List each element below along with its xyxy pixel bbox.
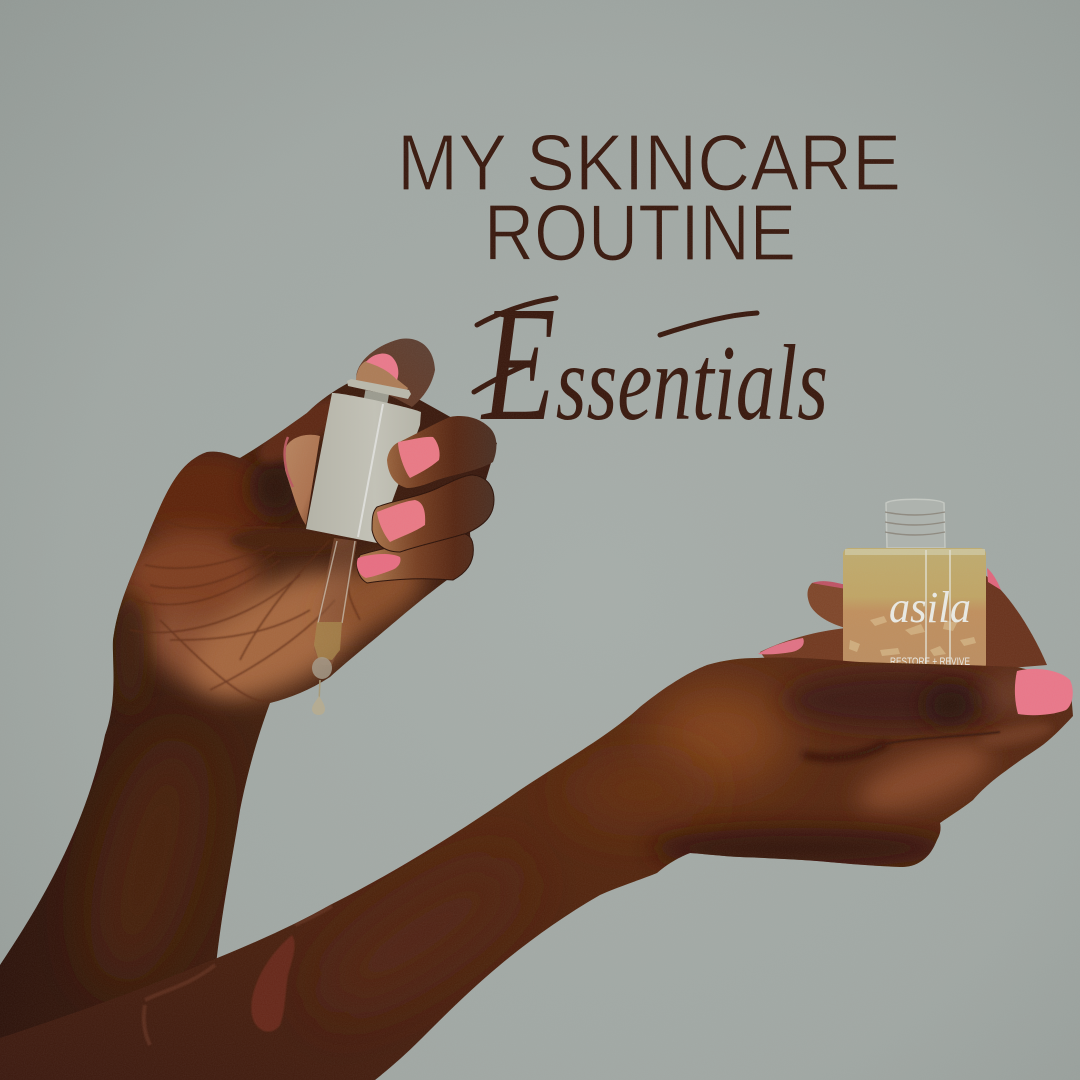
index finger left bbox=[808, 582, 846, 628]
thumb tip on left of cap bbox=[285, 435, 320, 525]
finger one bbox=[387, 416, 496, 488]
dropper cap disc bbox=[347, 379, 411, 399]
title line: my skincare: MY SKINCARE bbox=[397, 118, 901, 207]
arm and hand base bbox=[0, 640, 1080, 1080]
left forearm and hand bbox=[0, 338, 497, 1038]
dropper bbox=[306, 379, 421, 715]
top finger nail bbox=[366, 354, 398, 380]
glass top bbox=[845, 549, 985, 555]
title line: routine: ROUTINE bbox=[484, 188, 796, 277]
brush swashes bbox=[474, 298, 757, 392]
glass tip bbox=[312, 657, 332, 679]
top finger pad bbox=[356, 361, 408, 396]
lower finger left bbox=[760, 628, 846, 665]
bottle neck bbox=[886, 499, 945, 548]
lower nail bbox=[758, 638, 804, 654]
back nail bbox=[987, 568, 1001, 590]
top finger bbox=[356, 339, 435, 407]
oil drop bbox=[312, 696, 325, 715]
neck threads bbox=[885, 512, 945, 535]
thumb nail edge bbox=[285, 437, 293, 487]
palm creases bbox=[130, 520, 360, 701]
oil sheen on arm bbox=[144, 906, 332, 1045]
thread of oil bbox=[319, 680, 320, 702]
back finger right of bottle bbox=[985, 575, 1047, 670]
crease under thumb bbox=[805, 744, 885, 758]
thumb nail bbox=[1015, 669, 1073, 715]
bottle tagline: RESTORE + REVIVE bbox=[890, 656, 970, 668]
tube edge bbox=[318, 541, 355, 623]
finger two bbox=[372, 475, 494, 552]
title bbox=[397, 118, 901, 277]
script subtitle: essentials bbox=[474, 272, 828, 455]
right hand back fingers bbox=[758, 568, 1047, 670]
index nail bbox=[812, 581, 846, 589]
bottle brand: asila bbox=[889, 583, 971, 632]
dropper neck bbox=[363, 390, 389, 408]
bottle body bbox=[843, 548, 986, 670]
gold flakes bbox=[849, 616, 976, 656]
hand base shape bbox=[0, 384, 497, 1038]
nail one bbox=[398, 437, 440, 478]
lower arm and right hand bbox=[0, 640, 1080, 1080]
essentials word: Essentials bbox=[481, 272, 828, 455]
dropper cap body bbox=[306, 393, 421, 543]
oil streak on arm bbox=[251, 935, 295, 1032]
glass tube bbox=[314, 538, 357, 665]
cap edge highlight bbox=[358, 404, 383, 537]
nail two bbox=[377, 500, 425, 542]
nail three bbox=[357, 554, 401, 578]
oil in tube bbox=[314, 622, 342, 660]
thumb underside line bbox=[885, 732, 1000, 744]
bottle highlight lines bbox=[926, 550, 950, 665]
finger three bbox=[357, 533, 473, 583]
serum bottle bbox=[843, 499, 986, 670]
fingers over the cap bbox=[357, 416, 496, 583]
